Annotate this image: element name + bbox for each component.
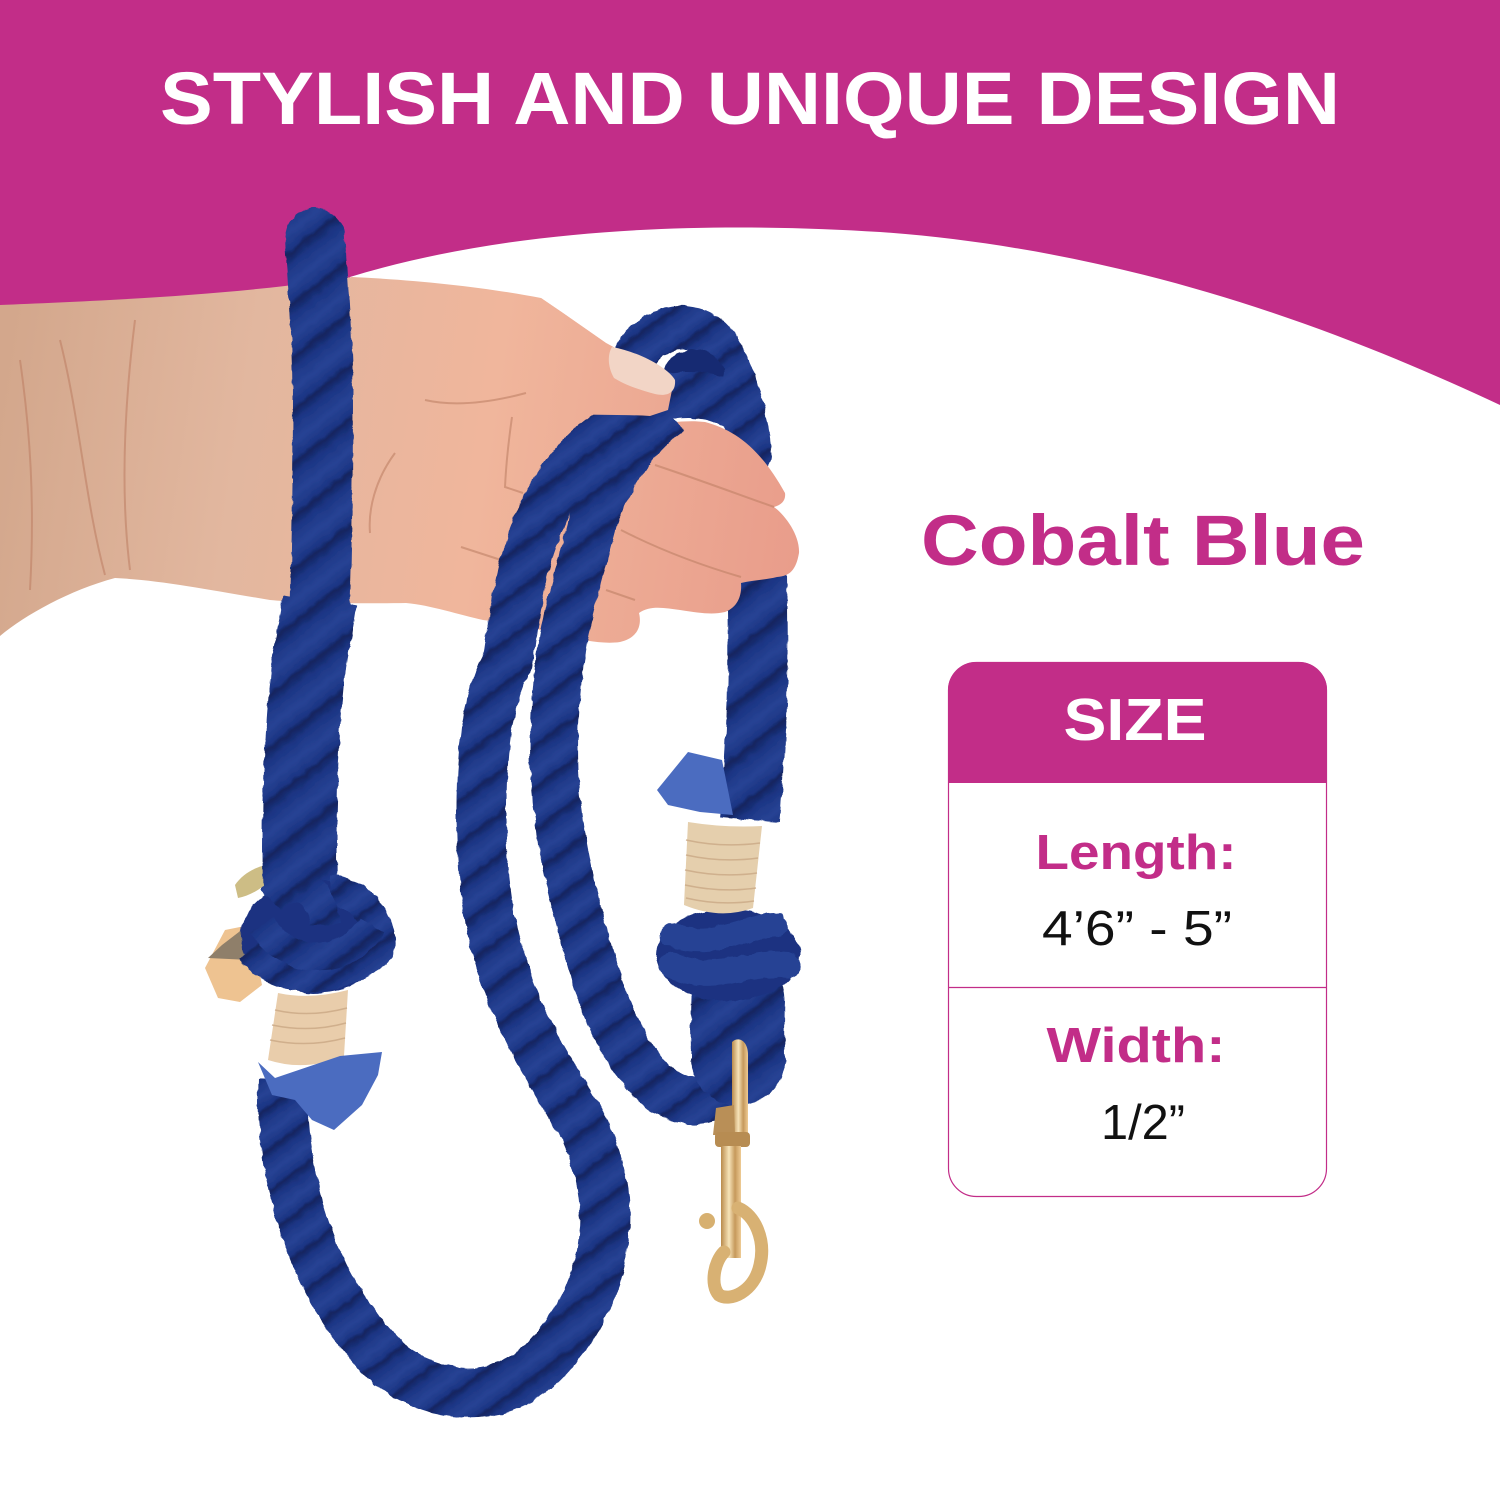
left knot	[241, 881, 389, 993]
snap hook	[699, 1039, 762, 1297]
thumb nail	[609, 347, 675, 395]
rope end under hand	[750, 575, 758, 820]
brass bell and clasp	[205, 864, 283, 1002]
table header	[948, 662, 1327, 783]
hand	[0, 277, 799, 643]
size table	[948, 662, 1327, 1196]
table heading: SIZE	[1064, 687, 1206, 753]
width label: Width:	[1046, 1019, 1226, 1073]
long strand around lower loop	[283, 405, 660, 1393]
frayed tassels	[258, 752, 733, 1130]
right lower rope	[691, 1000, 785, 1058]
hand creases	[20, 320, 774, 600]
colour name: Cobalt Blue	[921, 502, 1365, 581]
width value: 1/2”	[1101, 1096, 1185, 1150]
left rope lower	[299, 600, 320, 890]
length value: 4’6” - 5”	[1042, 902, 1232, 956]
thumb over rope	[490, 298, 674, 416]
title: STYLISH AND UNIQUE DESIGN	[160, 57, 1340, 140]
left rope upper	[315, 238, 323, 610]
header banner	[0, 0, 1500, 405]
inner strand	[554, 412, 745, 1100]
strand junction under thumb	[650, 395, 730, 405]
rope loop behind fingers	[628, 328, 750, 455]
length label: Length:	[1036, 826, 1236, 880]
right knot	[656, 909, 800, 1001]
tan wraps	[268, 822, 762, 1065]
photo: hand holding rope leash	[0, 238, 800, 1393]
rope strands	[283, 238, 745, 1393]
